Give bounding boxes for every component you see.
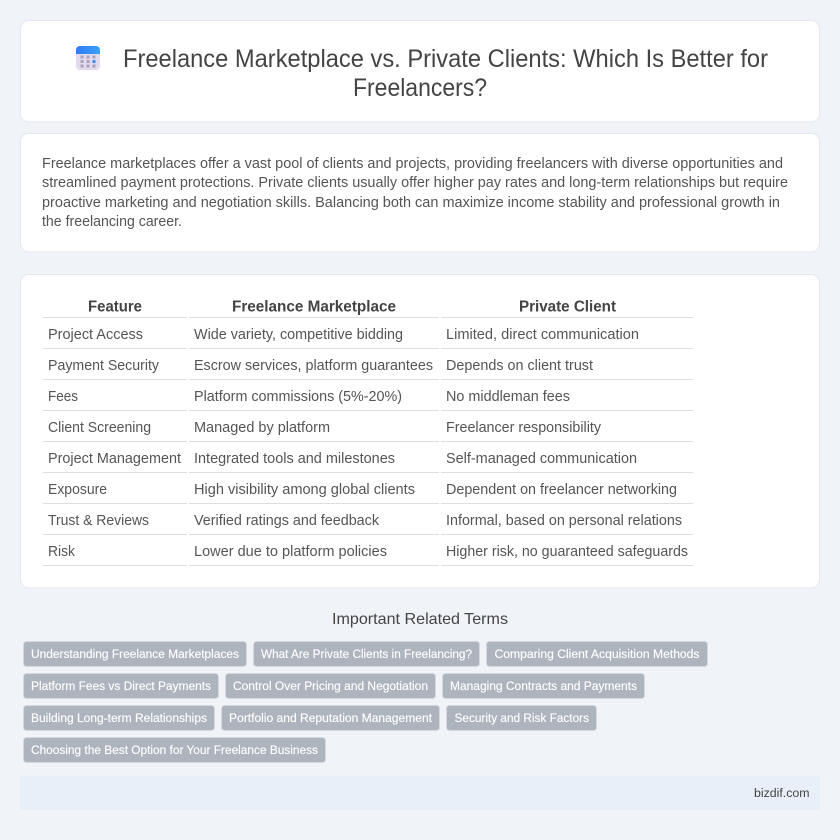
text: description paragraph bbox=[42, 156, 788, 230]
row: client screening bbox=[43, 420, 693, 442]
row: client screening: Freelancer responsibility bbox=[446, 420, 602, 436]
tag bbox=[24, 738, 326, 762]
row: trust and reviews: Verified ratings and feedback bbox=[194, 513, 380, 529]
table header bbox=[43, 298, 693, 318]
tag bbox=[24, 642, 246, 666]
tag bbox=[24, 674, 218, 698]
title bbox=[123, 45, 768, 102]
row: trust and reviews: Informal, based on personal relations bbox=[446, 513, 682, 529]
row: payment security: Depends on client trust bbox=[446, 358, 593, 374]
text: description paragraph: the freelancing career. bbox=[42, 214, 182, 230]
tag bbox=[254, 642, 480, 666]
heading: important related terms: Important Related Terms bbox=[332, 611, 508, 628]
row: exposure: High visibility among global clients bbox=[194, 482, 415, 498]
row: project management: Project Management bbox=[48, 451, 181, 467]
row: client screening: Client Screening bbox=[48, 420, 151, 436]
tag: Managing Contracts and Payments bbox=[450, 679, 637, 693]
related terms tags bbox=[24, 642, 708, 762]
icon: calendar bbox=[76, 46, 100, 70]
tag bbox=[24, 706, 214, 730]
tag bbox=[486, 642, 708, 666]
row: project access: Wide variety, competitive bidding bbox=[194, 327, 403, 343]
row: project access: Project Access bbox=[48, 327, 143, 343]
tag: Building Long-term Relationships bbox=[31, 711, 207, 725]
title: Freelancers? bbox=[353, 74, 487, 102]
row: fees: No middleman fees bbox=[446, 389, 570, 405]
row: risk: Lower due to platform policies bbox=[194, 544, 387, 560]
tag bbox=[442, 674, 644, 698]
row: payment security bbox=[43, 358, 693, 380]
row: fees: Fees bbox=[48, 389, 78, 405]
tag: What Are Private Clients in Freelancing? bbox=[261, 647, 472, 661]
table header: Freelance Marketplace bbox=[232, 298, 396, 316]
tag bbox=[446, 706, 596, 730]
row: fees: Platform commissions (5%-20%) bbox=[194, 389, 402, 405]
row: project access bbox=[43, 327, 693, 348]
text: description paragraph: Freelance marketplaces offer a vast pool of clients and projects, providing freelancers with diverse opportunities and bbox=[42, 156, 783, 172]
row: exposure bbox=[43, 482, 693, 504]
text: description paragraph: proactive marketing and negotiation skills. Balancing both can maximize income stability and professional growth in bbox=[42, 195, 780, 211]
title: Freelance Marketplace vs. Private Clients: Which Is Better for bbox=[123, 45, 768, 73]
row: client screening: Managed by platform bbox=[194, 420, 330, 436]
row: project access: Limited, direct communication bbox=[446, 327, 639, 343]
footer bbox=[20, 776, 820, 810]
tag: Choosing the Best Option for Your Freelance Business bbox=[31, 743, 318, 757]
text: description paragraph: streamlined payment protections. Private clients usually offer higher pay rates and long-term relationships but require bbox=[42, 175, 788, 191]
panel: description bbox=[20, 134, 820, 252]
row: exposure: Exposure bbox=[48, 482, 107, 498]
row: trust and reviews bbox=[43, 513, 693, 534]
tag bbox=[222, 706, 440, 730]
panel: header bbox=[20, 20, 820, 122]
row: project management bbox=[43, 451, 693, 472]
footer source text: bizdif.com bbox=[754, 786, 810, 800]
table header: Feature bbox=[88, 298, 142, 316]
row: trust and reviews: Trust & Reviews bbox=[48, 513, 149, 529]
tag: Understanding Freelance Marketplaces bbox=[31, 647, 239, 661]
tag bbox=[226, 674, 436, 698]
tag: Comparing Client Acquisition Methods bbox=[494, 647, 700, 661]
row: project management: Self-managed communication bbox=[446, 451, 637, 467]
row: risk: Risk bbox=[48, 544, 76, 560]
row: risk: Higher risk, no guaranteed safeguards bbox=[446, 544, 688, 560]
row: fees bbox=[43, 389, 693, 410]
row: payment security: Escrow services, platform guarantees bbox=[194, 358, 433, 374]
tag: Control Over Pricing and Negotiation bbox=[233, 679, 428, 693]
row: project management: Integrated tools and milestones bbox=[194, 451, 395, 467]
tag: Platform Fees vs Direct Payments bbox=[31, 679, 211, 693]
panel: comparison table bbox=[20, 274, 820, 588]
row: exposure: Dependent on freelancer networking bbox=[446, 482, 677, 498]
tag: Security and Risk Factors bbox=[454, 711, 589, 725]
tag: Portfolio and Reputation Management bbox=[229, 711, 433, 725]
row: payment security: Payment Security bbox=[48, 358, 160, 374]
table header: Private Client bbox=[519, 298, 617, 316]
row: risk bbox=[43, 544, 693, 566]
